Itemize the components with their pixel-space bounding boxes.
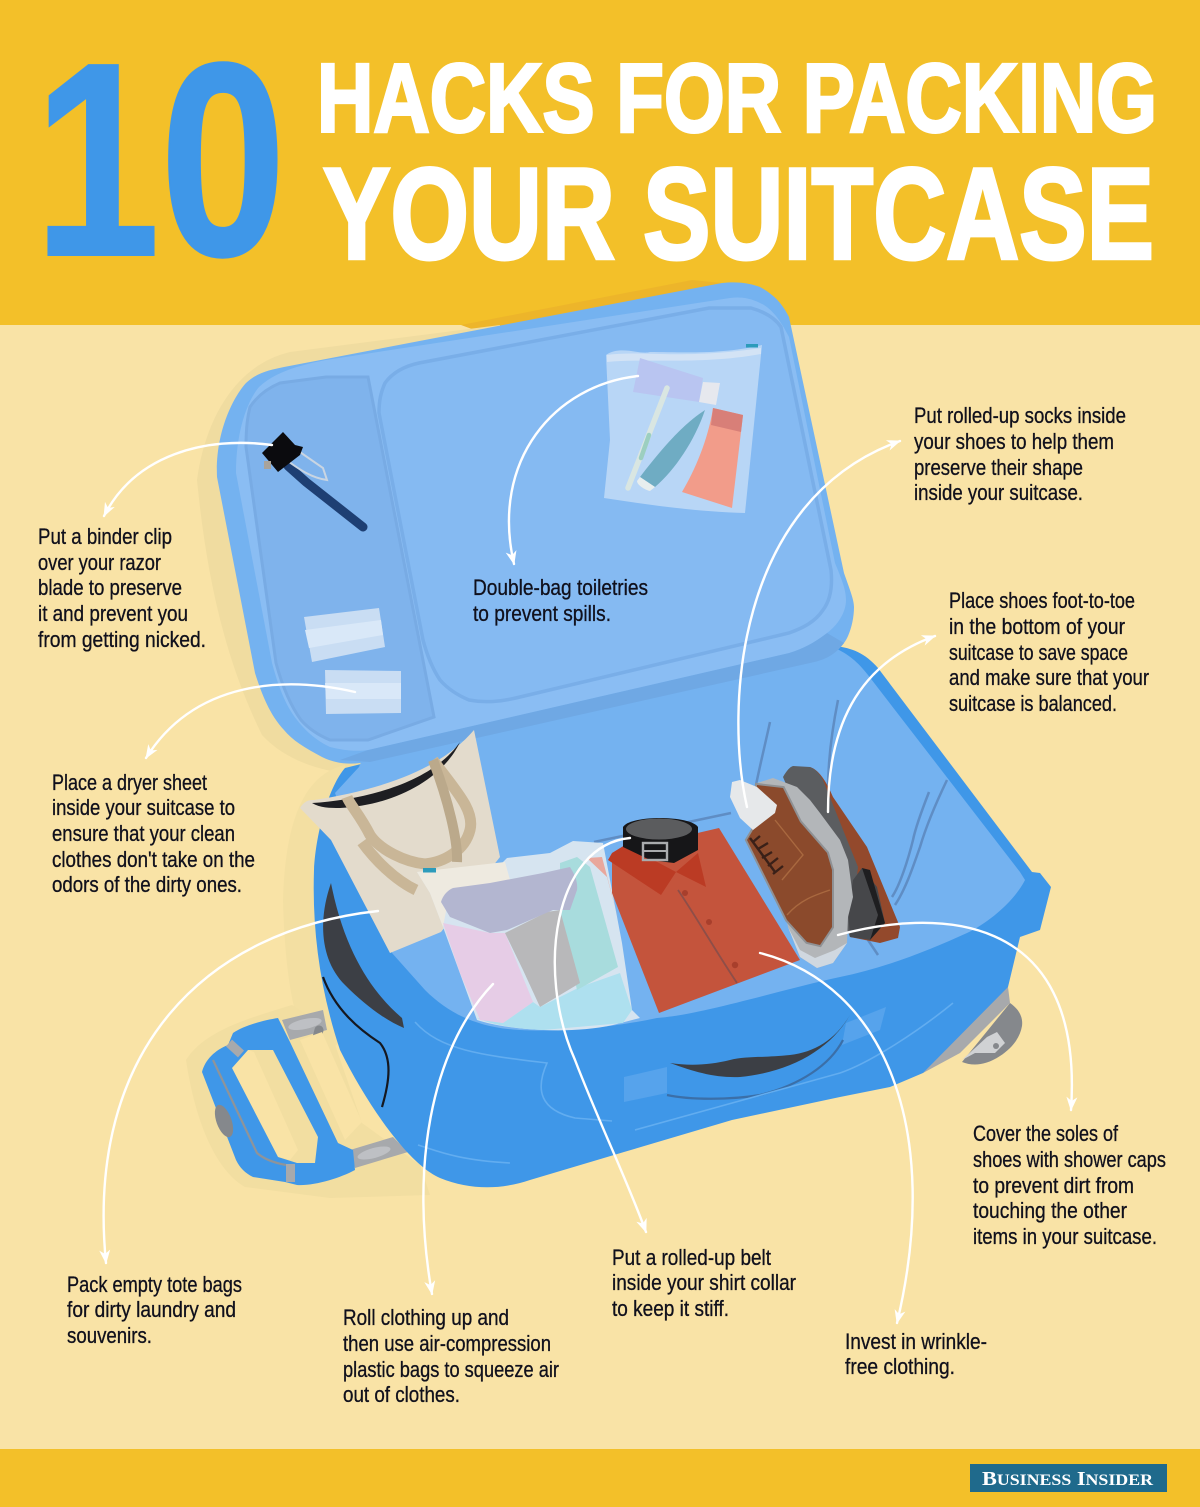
tip: shower caps: items in your suitcase. — [973, 1224, 1157, 1249]
toiletries bag — [604, 344, 762, 513]
arrows — [104, 376, 1072, 1323]
tip: shower caps: to prevent dirt from — [973, 1173, 1134, 1198]
tote bag — [300, 730, 500, 953]
front pocket zipper — [670, 1015, 850, 1077]
tip: dryer sheet: inside your suitcase to — [52, 795, 235, 820]
suitcase lid — [217, 282, 854, 764]
arrow: shoes — [828, 636, 935, 812]
side zipper — [323, 883, 404, 1028]
teal tube — [640, 410, 705, 487]
arrow: belt — [555, 838, 646, 1232]
tip: socks: Put rolled-up socks inside — [914, 403, 1126, 428]
arrow: compression bag — [423, 984, 493, 1294]
title number 10: 10 — [34, 6, 286, 314]
tip: tote bags: for dirty laundry and — [67, 1297, 236, 1322]
tip: razor: it and prevent you — [38, 601, 188, 626]
purple pouch — [633, 358, 703, 402]
footer band — [0, 1449, 1200, 1507]
tip: dryer sheet: ensure that your clean — [52, 821, 235, 846]
tip: belt: to keep it stiff. — [612, 1296, 729, 1321]
tip: socks: inside your suitcase. — [914, 480, 1083, 505]
second shoe sole — [810, 767, 900, 943]
tip: compression bags: Roll clothing up and — [343, 1305, 509, 1330]
arrow: toiletries — [509, 376, 638, 564]
tip: shower caps: shoes with shower caps — [973, 1147, 1166, 1172]
tip: razor: Put a binder clip — [38, 524, 172, 549]
arrow: tote — [104, 911, 378, 1263]
lid lower band — [340, 633, 844, 762]
title — [34, 6, 1157, 314]
body seams — [415, 1003, 953, 1163]
tip: shoes: suitcase to save space — [949, 640, 1128, 665]
front pocket — [624, 1007, 886, 1102]
tip: dryer sheet: clothes don't take on the — [52, 847, 255, 872]
tip: shoes: and make sure that your — [949, 665, 1149, 690]
tip: dryer sheet: Place a dryer sheet — [52, 770, 207, 795]
teal clothing — [560, 857, 618, 990]
shower cap — [757, 778, 853, 968]
arrow: socks — [738, 441, 900, 807]
rolled-up sock — [730, 780, 777, 830]
shoes — [730, 766, 900, 968]
tip: belt: Put a rolled-up belt — [612, 1245, 771, 1270]
tip: shoes: suitcase is balanced. — [949, 691, 1117, 716]
shirt sleeve through bag — [587, 857, 622, 933]
telescopic handle — [202, 1010, 408, 1185]
lid inner rim — [236, 297, 846, 751]
arrow: shower cap — [838, 923, 1072, 1110]
tip: wrinkle-free: Invest in wrinkle- — [845, 1329, 987, 1354]
wheel — [923, 987, 1022, 1073]
light blue clothing — [477, 973, 632, 1030]
shoe stitching — [775, 820, 830, 915]
white cap — [699, 382, 720, 405]
gray clothing — [505, 910, 580, 1007]
tip: toiletries: Double-bag toiletries — [473, 575, 648, 600]
tip: socks: your shoes to help them — [914, 429, 1114, 454]
razor with binder clip — [262, 432, 363, 527]
buttons — [682, 890, 738, 968]
tip: razor: from getting nicked. — [38, 627, 206, 652]
lavender clothing — [441, 867, 577, 933]
tip: compression bags: then use air-compression — [343, 1331, 551, 1356]
tip: shoes: in the bottom of your — [949, 614, 1125, 639]
bag upper beige — [417, 862, 510, 927]
binder clip — [262, 432, 303, 472]
brown shoe — [747, 785, 832, 945]
left compartment — [246, 377, 434, 740]
handle grip — [202, 1018, 355, 1185]
dryer sheet 1 — [304, 608, 385, 662]
tote opening — [312, 742, 460, 808]
placket — [678, 890, 737, 983]
handle shadow — [186, 1005, 430, 1198]
tip: tote bags: souvenirs. — [67, 1323, 152, 1348]
tip: shower caps: Cover the soles of — [973, 1121, 1119, 1146]
tip: dryer sheet: odors of the dirty ones. — [52, 872, 242, 897]
tip: razor: blade to preserve — [38, 575, 182, 600]
tip: wrinkle-free: free clothing. — [845, 1354, 955, 1379]
pink clothing — [443, 923, 533, 1023]
dryer sheet 2 — [325, 670, 401, 714]
laces — [750, 836, 783, 874]
header band — [0, 0, 1200, 325]
tip: tote bags: Pack empty tote bags — [67, 1272, 242, 1297]
rolled-up belt — [623, 818, 698, 863]
tip: razor: over your razor — [38, 550, 161, 575]
lid shadow — [197, 280, 722, 775]
tip: compression bags: plastic bags to squeeze air — [343, 1357, 559, 1382]
body interior — [335, 648, 1025, 1030]
main compartment — [379, 308, 832, 702]
air-compression bag of clothes — [417, 841, 640, 1030]
toothbrush — [628, 388, 667, 488]
arrow: razor — [104, 443, 272, 516]
tip: shower caps: touching the other — [973, 1198, 1127, 1223]
interior folds — [594, 700, 947, 955]
tip: toiletries: to prevent spills. — [473, 601, 611, 626]
tote handles — [347, 760, 471, 864]
dryer sheets — [304, 608, 401, 714]
tip: socks: preserve their shape — [914, 455, 1083, 480]
tip: shoes: Place shoes foot-to-toe — [949, 588, 1135, 613]
logo: Business Insider — [970, 1464, 1167, 1492]
light strip — [232, 1050, 298, 1160]
handle posts — [282, 1010, 327, 1040]
red tube — [682, 408, 743, 508]
suitcase shadow — [283, 765, 400, 1060]
logo: Business Insider: BUSINESS INSIDER — [982, 1468, 1153, 1490]
tip: compression bags: out of clothes. — [343, 1382, 460, 1407]
shirt collar — [608, 845, 676, 895]
second shoe dark — [783, 766, 858, 937]
arrow: wrinkle-free — [760, 953, 913, 1323]
suitcase body — [314, 646, 1051, 1187]
belt buckle — [643, 843, 667, 860]
arrow: dryer sheet — [146, 684, 355, 758]
shirt — [608, 828, 800, 1013]
second shoe heel — [848, 868, 885, 940]
tip: belt: inside your shirt collar — [612, 1270, 796, 1295]
